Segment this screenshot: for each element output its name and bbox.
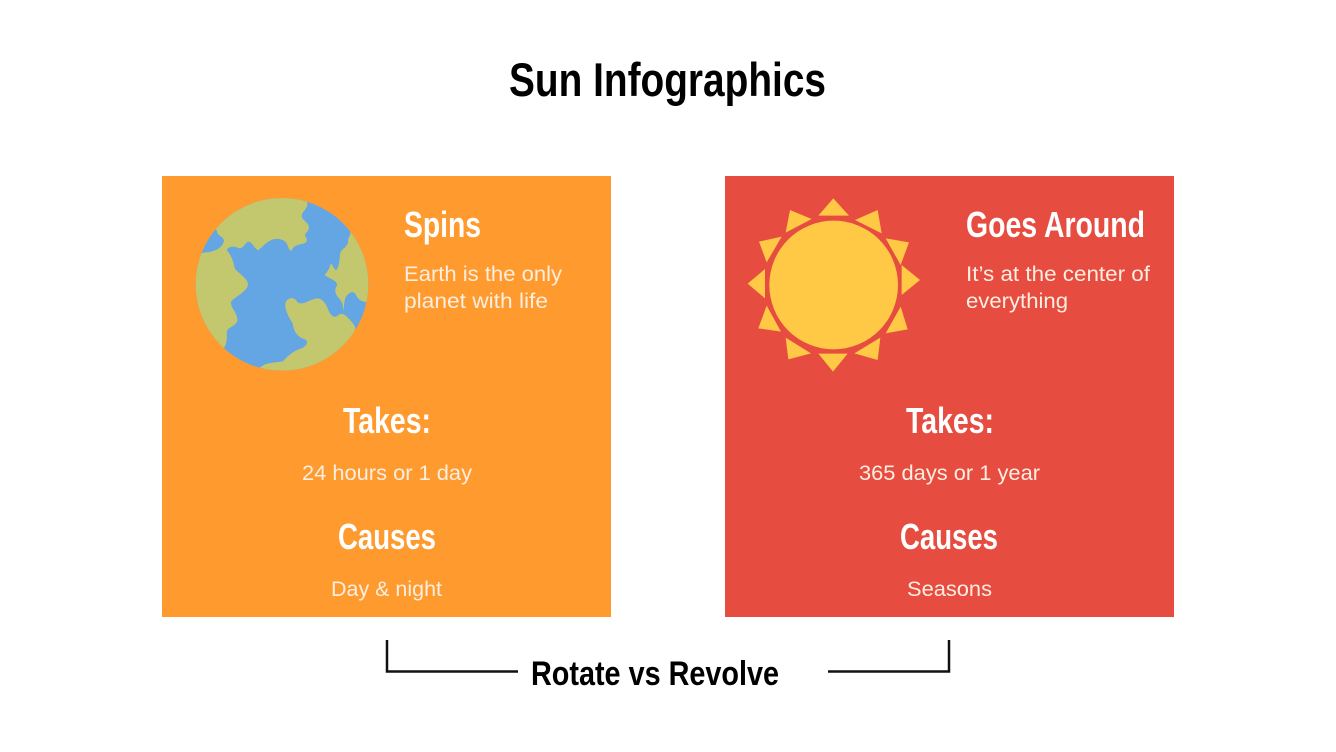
text: duration: 365 days or 1 year xyxy=(859,462,1040,485)
heading: Causes: Causes xyxy=(900,516,998,557)
text: earth description: planet with life xyxy=(404,290,548,313)
text: effect: Seasons xyxy=(907,578,992,601)
heading: Causes: Causes xyxy=(338,516,436,557)
text: duration: 24 hours or 1 day xyxy=(302,462,473,485)
icon: earth xyxy=(196,198,368,371)
icon: sun xyxy=(748,198,920,372)
text: sun description: everything xyxy=(966,290,1068,313)
heading: Spins: Spins xyxy=(404,204,481,245)
text: effect: Day & night xyxy=(331,578,442,601)
panel: spins xyxy=(162,176,611,617)
title: Sun Infographics xyxy=(509,53,826,106)
text: sun description: It’s at the center of xyxy=(966,263,1150,286)
caption: Rotate vs Revolve: Rotate vs Revolve xyxy=(531,655,779,693)
heading: Takes: Takes: xyxy=(906,400,994,441)
text: sun description xyxy=(966,263,1150,313)
panel: goes around xyxy=(725,176,1174,617)
heading: Goes Around: Goes Around xyxy=(966,204,1145,245)
text: earth description: Earth is the only xyxy=(404,263,563,286)
panel background: red xyxy=(725,176,1174,617)
bracket: right connector xyxy=(828,640,949,672)
bracket: left connector xyxy=(387,640,518,672)
text: earth description xyxy=(404,263,563,313)
panel background: orange xyxy=(162,176,611,617)
heading: Takes: Takes: xyxy=(343,400,431,441)
